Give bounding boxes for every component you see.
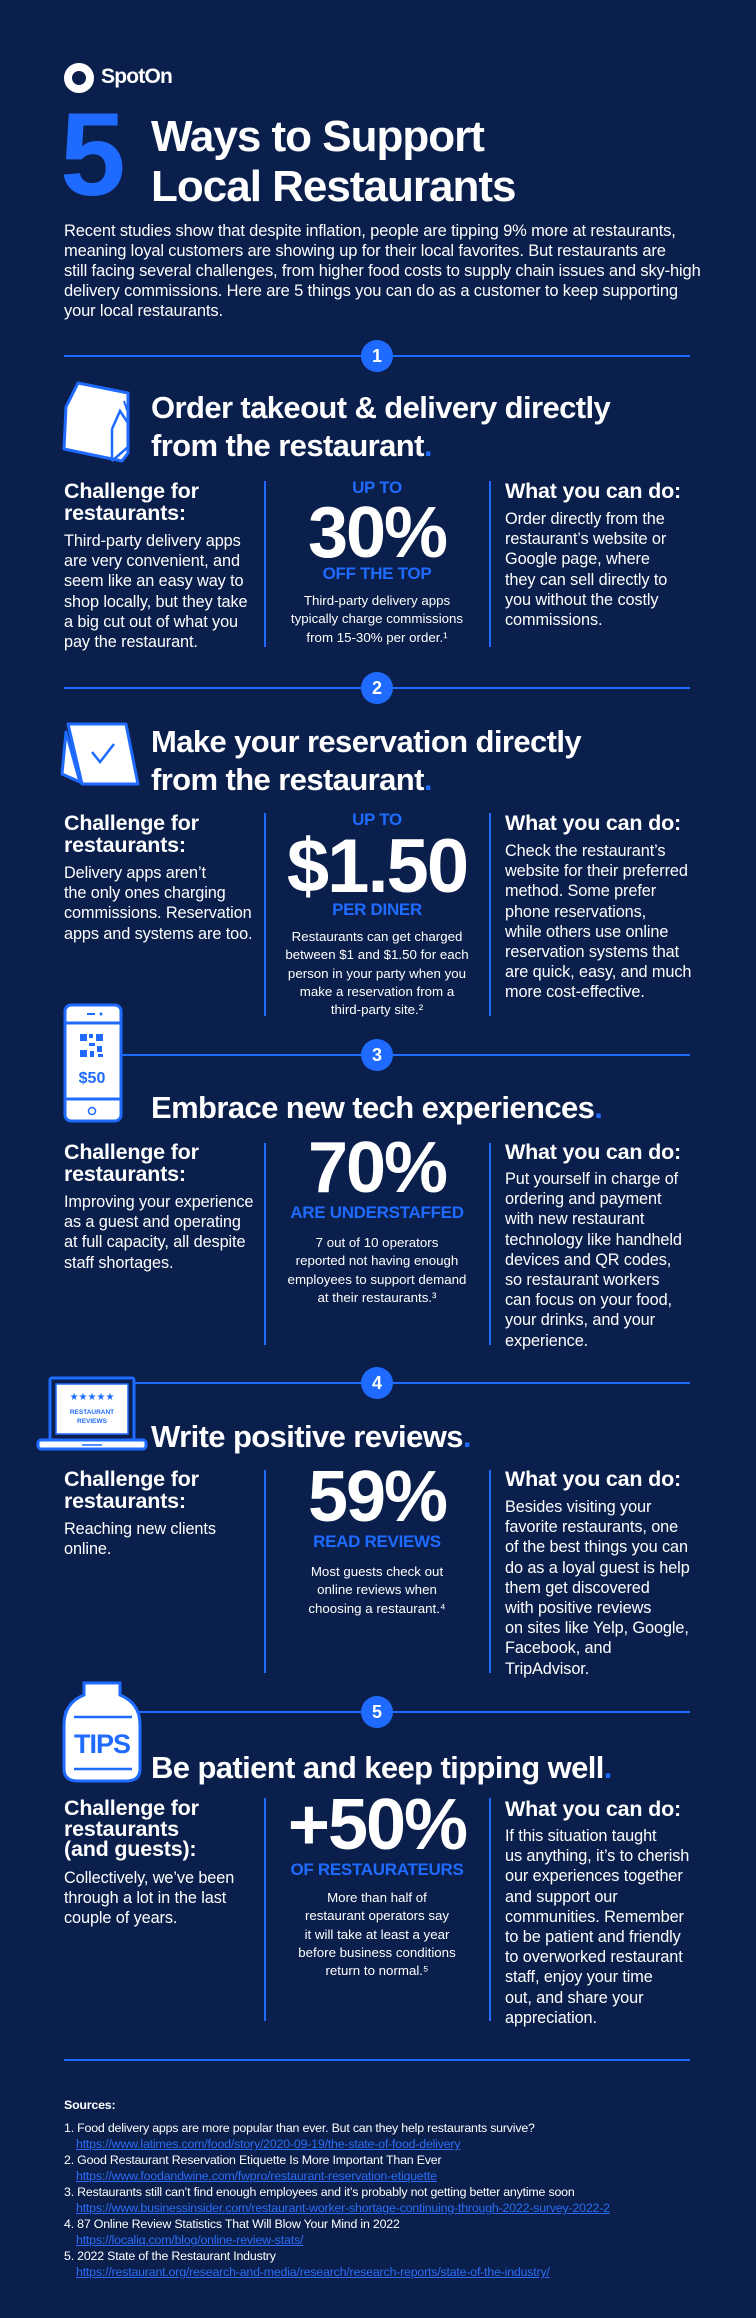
sources: 2. Good Restaurant Reservation Etiquette Is More Important Than Ever [64,2153,441,2167]
stat 5: More than half of [327,1890,427,1905]
stat 5 [288,1785,466,1978]
panel 2 what you can do: phone reservations, [505,903,646,921]
panel 5 challenge [64,1796,234,1927]
panel 3 what you can do: so restaurant workers [505,1271,659,1289]
stat 4 [308,1457,446,1616]
panel 4 what you can do: What you can do: [505,1467,681,1491]
panel 5 what you can do: What you can do: [505,1797,681,1821]
icon: phone with QR [64,1004,122,1122]
panel 1 what you can do [505,479,681,629]
stat 3: employees to support demand [288,1272,466,1287]
panel 5 what you can do: communities. Remember [505,1908,684,1926]
sources: https://restaurant.org/research-and-media/research/research-reports/state-of-the-industry/ [76,2265,550,2279]
panel 3 what you can do [505,1140,682,1350]
panel 2 what you can do [505,811,691,1001]
stat 4: Most guests check out [311,1564,443,1579]
icon: reservation card [60,722,140,786]
number 4 [361,1367,393,1399]
panel 4 challenge: online. [64,1540,111,1558]
panel 2 what you can do: method. Some prefer [505,882,656,900]
stat 3: ARE UNDERSTAFFED [290,1203,464,1222]
stat 1: OFF THE TOP [323,564,431,583]
panel 1 what you can do: What you can do: [505,479,681,503]
heading 2: Make your reservation directly [151,724,581,759]
stat 4: 59% [308,1457,446,1537]
panel 3 what you can do: technology like handheld [505,1231,682,1249]
title: 5 [60,89,122,221]
panel 4 what you can do: of the best things you can [505,1538,688,1556]
number 1 [361,340,393,372]
panel 4 challenge [64,1467,216,1558]
panel 5 what you can do [505,1797,689,2027]
icon: takeout bag [62,382,130,462]
panel 2 challenge: commissions. Reservation [64,904,252,922]
panel 1 what you can do: commissions. [505,611,602,629]
intro text: your local restaurants. [64,302,223,320]
stat 3: reported not having enough [296,1253,458,1268]
stat 1: UP TO [352,478,402,497]
panel 1 challenge [64,479,247,651]
panel 3 challenge: staff shortages. [64,1254,173,1272]
panel 5 challenge: couple of years. [64,1909,177,1927]
panel 2 what you can do: Check the restaurant’s [505,842,665,860]
logo [64,63,172,93]
stat 1 [291,478,463,645]
panel 1 challenge: Third-party delivery apps [64,532,241,550]
panel 2 challenge: restaurants: [64,833,186,857]
logo: SpotOn [101,65,172,88]
panel 1 challenge: Challenge for [64,479,199,503]
sources: https://localiq.com/blog/online-review-stats/ [76,2233,303,2247]
panel 5 what you can do: out, and share your [505,1989,643,2007]
panel 4 what you can do: TripAdvisor. [505,1660,589,1678]
panel 3 challenge: as a guest and operating [64,1213,241,1231]
stat 5: return to normal.⁵ [325,1963,429,1978]
stat 2: Restaurants can get charged [292,929,462,944]
panel 1 challenge: shop locally, but they take [64,593,247,611]
panel 2 what you can do: more cost-effective. [505,983,645,1001]
panel 4 what you can do: with positive reviews [505,1599,651,1617]
panel 5 what you can do: appreciation. [505,2009,597,2027]
intro text: still facing several challenges, from higher food costs to supply chain issues and sky-high [64,262,701,280]
panel 4 what you can do: Besides visiting your [505,1498,651,1516]
panel 4 what you can do: on sites like Yelp, Google, [505,1619,689,1637]
stat 4: choosing a restaurant.⁴ [308,1601,446,1616]
icon: laptop reviews: REVIEWS [77,1418,108,1425]
sources: 5. 2022 State of the Restaurant Industry [64,2249,276,2263]
intro text [64,222,701,320]
stat 3: 7 out of 10 operators [316,1235,438,1250]
panel 1 what you can do: you without the costly [505,591,658,609]
title: Ways to Support [151,112,484,161]
stat 5: before business conditions [298,1945,456,1960]
stat 5: OF RESTAURATEURS [290,1860,464,1879]
panel 5 what you can do: to be patient and friendly [505,1928,681,1946]
number 1: 1 [372,346,382,366]
panel 3 what you can do: ordering and payment [505,1190,661,1208]
stat 3: at their restaurants.³ [318,1290,436,1305]
panel 5 what you can do: our experiences together [505,1867,683,1885]
panel 2 what you can do: are quick, easy, and much [505,963,691,981]
stat 2 [285,810,469,1017]
sources: 3. Restaurants still can’t find enough employees and it’s probably not getting better anytime soon [64,2185,575,2199]
stat 5: +50% [288,1785,466,1865]
panel 1 what you can do: Order directly from the [505,510,665,528]
panel 2 challenge [64,811,252,943]
panel 4 what you can do: Facebook, and [505,1639,611,1657]
panel 5 challenge: (and guests): [64,1837,196,1861]
stat 1: 30% [308,493,446,573]
panel 3 challenge: Challenge for [64,1140,199,1164]
sources: 4. 87 Online Review Statistics That Will Blow Your Mind in 2022 [64,2217,400,2231]
icon: laptop reviews: RESTAURANT [70,1409,114,1416]
heading 1: Order takeout & delivery directly [151,390,610,425]
sources [64,2098,610,2279]
intro text: delivery commissions. Here are 5 things you can do as a customer to keep supporting [64,282,678,300]
panel 2 what you can do: website for their preferred [505,862,688,880]
panel 1 challenge: are very convenient, and [64,552,240,570]
heading 2: from the restaurant. [151,762,432,797]
number 5 [361,1696,393,1728]
heading 2 [151,724,582,797]
panel 1 challenge: pay the restaurant. [64,633,198,651]
stat 2: person in your party when you [288,966,466,981]
panel 1 challenge: restaurants: [64,501,186,525]
panel 2 challenge: Challenge for [64,811,199,835]
panel 2 what you can do: while others use online [505,923,668,941]
stat 2: UP TO [352,810,402,829]
stat 2: $1.50 [287,824,467,909]
number 3 [361,1039,393,1071]
stat 1: from 15-30% per order.¹ [306,630,448,645]
panel 4 challenge: restaurants: [64,1489,186,1513]
panel 4 what you can do: them get discovered [505,1579,650,1597]
stat 3 [288,1128,466,1305]
panel 4 what you can do: do as a loyal guest is help [505,1559,690,1577]
panel 5 what you can do: If this situation taught [505,1827,656,1845]
panel 5 challenge: through a lot in the last [64,1889,226,1907]
stat 1: Third-party delivery apps [304,593,450,608]
stat 5: restaurant operators say [305,1908,449,1923]
sources: https://www.latimes.com/food/story/2020-09-19/the-state-of-food-delivery [76,2137,460,2151]
intro text: Recent studies show that despite inflation, people are tipping 9% more at restaurants, [64,222,676,240]
panel 1 what you can do: restaurant’s website or [505,530,666,548]
panel 3 what you can do: Put yourself in charge of [505,1170,678,1188]
heading 1: from the restaurant. [151,428,432,463]
panel 5 challenge: Collectively, we’ve been [64,1869,234,1887]
sources: https://www.businessinsider.com/restaurant-worker-shortage-continuing-through-2022-survey-2022-2 [76,2201,610,2215]
panel 2 challenge: Delivery apps aren’t [64,864,206,882]
intro text: meaning loyal customers are showing up for their local favorites. But restaurants are [64,242,666,260]
panel 1 what you can do: they can sell directly to [505,571,667,589]
panel 1 challenge: a big cut out of what you [64,613,238,631]
icon: phone with QR: $50 [79,1070,105,1087]
panel 5 what you can do: to overworked restaurant [505,1948,683,1966]
sources: 1. Food delivery apps are more popular than ever. But can they help restaurants survive? [64,2121,535,2135]
title [60,89,515,221]
panel 5 challenge: restaurants [64,1816,179,1840]
panel 2 challenge: apps and systems are too. [64,925,252,943]
panel 3 what you can do: can focus on your food, [505,1291,672,1309]
panel 4 what you can do: favorite restaurants, one [505,1518,678,1536]
panel 5 challenge: Challenge for [64,1796,199,1820]
heading 5: Be patient and keep tipping well. [151,1750,612,1785]
panel 1 challenge: seem like an easy way to [64,572,244,590]
panel 2 what you can do: reservation systems that [505,943,679,961]
panel 5 what you can do: staff, enjoy your time [505,1968,653,1986]
panel 3 what you can do: What you can do: [505,1140,681,1164]
title: Local Restaurants [151,162,515,211]
number 2 [361,672,393,704]
stat 2: between $1 and $1.50 for each [285,947,469,962]
panel 3 what you can do: experience. [505,1332,588,1350]
panel 4 challenge: Challenge for [64,1467,199,1491]
panel 4 what you can do [505,1467,690,1678]
icon: tips jar: TIPS [74,1729,130,1759]
number 3: 3 [372,1045,382,1065]
panel 4 challenge: Reaching new clients [64,1520,216,1538]
stat 4: READ REVIEWS [313,1532,441,1551]
panel 5 what you can do: and support our [505,1888,618,1906]
number 5: 5 [372,1702,382,1722]
panel 3 challenge [64,1140,253,1272]
heading 4: Write positive reviews. [151,1419,471,1454]
sources: Sources: [64,2098,115,2112]
stat 3: 70% [308,1128,446,1208]
panel 3 challenge: restaurants: [64,1162,186,1186]
stat 2: make a reservation from a [300,984,454,999]
panel 1 what you can do: Google page, where [505,550,650,568]
panel 3 what you can do: with new restaurant [505,1210,644,1228]
heading 3: Embrace new tech experiences. [151,1090,602,1125]
stat 1: typically charge commissions [291,611,463,626]
icon: laptop reviews [36,1376,148,1450]
heading 1 [151,390,611,463]
stat 5: it will take at least a year [305,1927,449,1942]
icon: laptop reviews: ★★★★★ [70,1392,114,1403]
panel 3 what you can do: devices and QR codes, [505,1251,671,1269]
panel 2 challenge: the only ones charging [64,884,226,902]
panel 3 challenge: at full capacity, all despite [64,1233,245,1251]
panel 2 what you can do: What you can do: [505,811,681,835]
icon: tips jar [62,1682,142,1782]
number 4: 4 [372,1373,382,1393]
panel 5 what you can do: us anything, it’s to cherish [505,1847,689,1865]
sources: https://www.foodandwine.com/fwpro/restaurant-reservation-etiquette [76,2169,437,2183]
stat 2: third-party site.² [331,1002,423,1017]
panel 3 challenge: Improving your experience [64,1193,253,1211]
stat 4: online reviews when [317,1582,437,1597]
panel 3 what you can do: your drinks, and your [505,1311,655,1329]
number 2: 2 [372,678,382,698]
stat 2: PER DINER [332,900,422,919]
